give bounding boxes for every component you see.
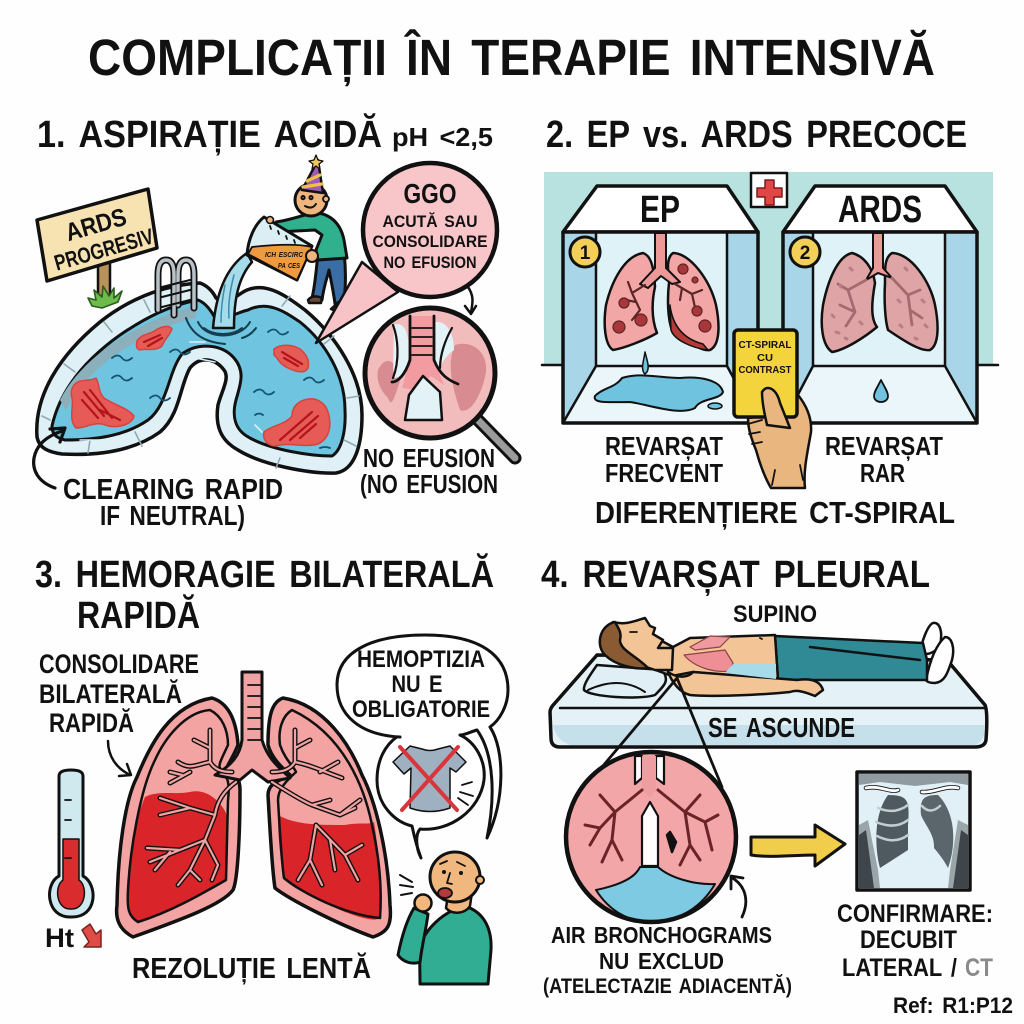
icon: magnifier over lungs [365,308,515,458]
icon: lung shaped pool [37,283,362,473]
label: hides effusion: SE ASCUNDE [708,712,855,743]
icon: ARDS diffuse lungs [822,233,938,352]
icon: EP lungs with embolic lesions [605,233,718,350]
label: CT differentiation: DIFERENȚIERE CT-SPIRAL [595,495,955,530]
callout: GGO description: GGO [404,178,456,209]
callout: hemoptysis not mandatory: HEMOPTIZIA [357,646,485,673]
icon: hand holding CT card: CONTRAST [738,364,792,376]
label: no effusion: (NO EFUSION [360,469,498,499]
label: air bronchograms: (ATELECTAZIE ADIACENTĂ) [543,975,792,998]
label: bilateral consolidation: CONSOLIDARE [39,649,199,679]
label: frequent effusion: FRECVENT [605,458,723,488]
icon: ARDS progressive sign: ARDS [62,203,130,247]
label: air bronchograms [543,922,792,998]
label: confirmation: DECUBIT [860,926,957,954]
callout: hemoptysis not mandatory: OBLIGATORIE [352,696,490,723]
icon: ARDS progressive sign [37,189,157,308]
arrow: air bronchograms to lung [731,876,746,917]
label: hematocrit falling [45,923,101,953]
panel: EP vs ARDS [542,114,998,530]
label: pH threshold: pH <2,5 [392,122,493,152]
label: rare effusion: RAR [860,458,905,488]
panel: hemoragie [35,552,508,985]
icon: red consolidation patches [71,326,330,446]
label: air bronchograms: NU EXCLUD [599,948,724,974]
icon: person with party hat pouring acid: PA CES [278,263,300,270]
arrow: clearing label to pool edge [34,428,65,488]
icon: hand holding CT card: CT-SPIRAL [738,339,792,351]
label: clearing rapid: CLEARING RAPID [63,474,283,506]
icon: person with party hat pouring acid: ICH ESCIRC [265,252,304,259]
panel: aspiratie acida [34,112,515,531]
heading: panel 3: RAPIDĂ [77,593,200,637]
label: no effusion [360,443,498,499]
callout: GGO description [316,163,497,343]
label: frequent effusion [605,431,723,488]
label: slow resolution: REZOLUȚIE LENTĂ [132,952,371,985]
label: clearing rapid [63,474,283,531]
icon: mattress [550,655,987,747]
box: ARDS chamber [783,186,977,423]
callout: GGO description: NO EFUSION [384,253,476,272]
callout: GGO description: CONSOLIDARE [372,232,488,251]
label: confirmation: LATERAL / [842,954,957,982]
label: clearing rapid: IF NEUTRAL) [100,500,245,531]
label: supine: SUPINO [733,601,817,628]
icon: magnified supine lung [566,678,736,922]
icon: crossed shirt thought bubble [377,735,484,858]
panel: revarsat pleural [541,554,1013,1018]
label: bilateral consolidation [39,649,199,738]
callout: GGO description: ACUTĂ SAU [382,212,478,231]
icon: supine patient [600,618,953,696]
heading: panel 4: 4. REVARȘAT PLEURAL [541,554,930,596]
label: rare effusion: REVARȘAT [825,431,943,461]
label: reference: Ref: R1:P12 [893,993,1013,1018]
badge: number 2: 2 [800,243,810,264]
label: EP: EP [640,189,680,231]
heading: panel 1: 1. ASPIRAȚIE ACIDĂ [37,112,382,156]
icon: pouring water stream [186,253,256,344]
label: frequent effusion: REVARȘAT [605,431,723,461]
icon: chest x-ray [857,772,970,890]
callout: hemoptysis not mandatory [337,635,508,838]
label: ARDS: ARDS [838,189,922,231]
icon: ARDS progressive sign: PROGRESIV [51,223,157,276]
icon: coughing patient [398,852,491,984]
badge: number 2 [790,237,820,267]
label: bilateral consolidation: BILATERALĂ [39,678,182,709]
icon: thermometer [50,770,93,917]
icon: pool ladder [158,260,194,315]
badge: number 1: 1 [580,243,591,264]
background: teal room wall [544,172,993,365]
badge: number 1 [570,237,600,267]
icon: hospital cross sign [751,173,787,207]
label: bilateral consolidation: RAPIDĂ [49,707,134,738]
heading: panel 3: 3. HEMORAGIE BILATERALĂ [35,552,494,596]
heading: panel 3 [35,552,494,637]
icon: patch scribbles [82,335,318,440]
label: hematocrit falling: Ht [45,923,74,953]
label: confirmation: CONFIRMARE: [837,900,993,928]
callout: hemoptysis not mandatory: NU E [392,671,442,698]
label: confirmation: CT [965,954,993,982]
arrow: callout to magnifier [465,287,476,314]
title: COMPLICAȚII ÎN TERAPIE INTENSIVĂ [88,28,935,87]
label: rare effusion [825,431,943,488]
heading: panel 2: 2. EP vs. ARDS PRECOCE [546,114,967,156]
icon: person with party hat pouring acid [247,155,347,312]
icon: small fluid drop [874,380,888,402]
label: no effusion: NO EFUSION [363,443,495,473]
icon: hand holding CT card: CU [757,352,773,364]
arrow: to confirmation imaging [751,825,845,866]
arrow: label to lung [108,741,131,776]
box: EP chamber [563,186,758,423]
icon: hand holding CT card [734,330,811,488]
label: air bronchograms: AIR BRONCHOGRAMS [551,922,772,948]
label: confirmation [837,900,993,982]
icon: large pleural fluid puddle [595,352,723,411]
icon: lungs with bilateral hemorrhage [117,672,390,937]
